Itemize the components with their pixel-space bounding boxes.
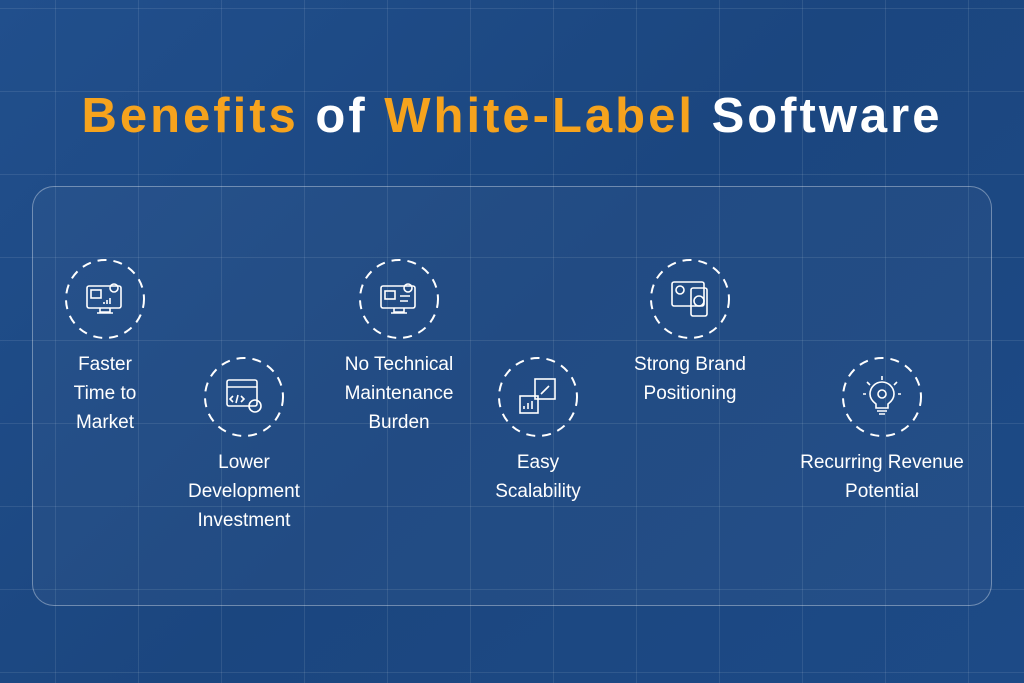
icon: code window gear [204, 357, 284, 437]
item: no technical maintenance burden [345, 259, 453, 433]
item: lower development investment [188, 357, 300, 531]
icon: devices [650, 259, 730, 339]
item: lower development investment: Investment [198, 510, 290, 531]
item: strong brand positioning: Positioning [644, 383, 736, 404]
title: Benefits of White-Label Software [81, 89, 943, 143]
icon: light bulb [842, 357, 922, 437]
item: no technical maintenance burden: No Technical [345, 354, 453, 375]
item: recurring revenue potential [800, 357, 964, 502]
item: strong brand positioning [634, 259, 746, 404]
item: no technical maintenance burden: Burden [368, 412, 430, 433]
panel: benefits [32, 186, 992, 606]
item: faster time to market: Faster [78, 354, 132, 375]
item: strong brand positioning: Strong Brand [634, 354, 746, 375]
icon: monitor [65, 259, 145, 339]
item: recurring revenue potential: Potential [845, 481, 919, 502]
item: faster time to market [65, 259, 145, 433]
item: easy scalability: Scalability [495, 481, 581, 502]
item: no technical maintenance burden: Maintenance [345, 383, 453, 404]
item: faster time to market: Time to [74, 383, 136, 404]
icon: scaling boxes [498, 357, 578, 437]
icon: AI monitor [359, 259, 439, 339]
item: faster time to market: Market [76, 412, 134, 433]
item: easy scalability [495, 357, 581, 502]
item: easy scalability: Easy [517, 452, 559, 473]
item: lower development investment: Lower [218, 452, 270, 473]
item: recurring revenue potential: Recurring Revenue [800, 452, 964, 473]
item: lower development investment: Development [188, 481, 300, 502]
